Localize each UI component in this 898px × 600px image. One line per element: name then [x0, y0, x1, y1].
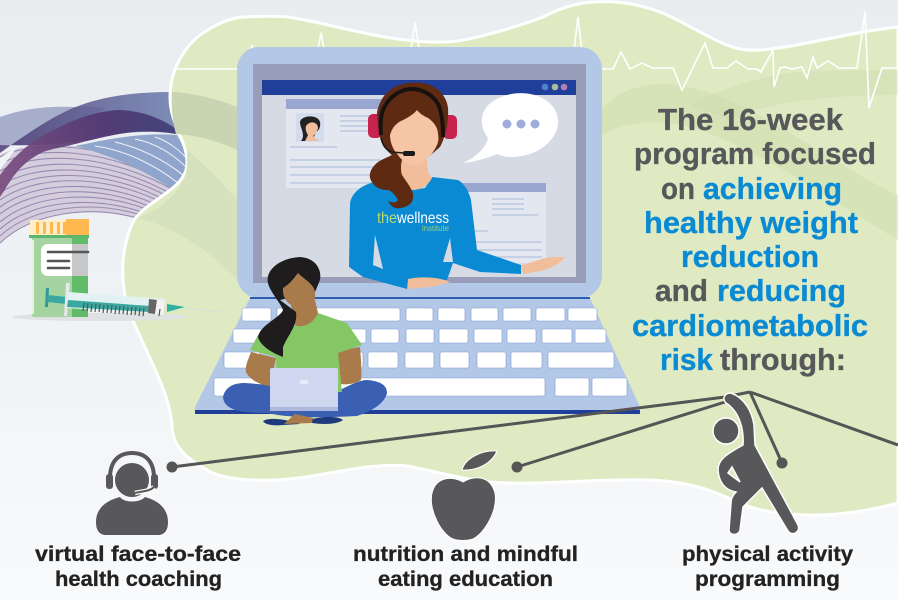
lilac line fan: [0, 145, 190, 243]
icon: stretching person: [713, 393, 799, 534]
ground shadow: [12, 313, 188, 321]
student legs: [223, 380, 387, 417]
heading: reducing: [717, 273, 846, 308]
bottle cap: [30, 220, 89, 236]
heading: reduction: [681, 239, 819, 274]
student hair: [258, 257, 320, 357]
coach hair: [370, 83, 448, 208]
faded ribbons inside blob: [137, 92, 237, 280]
caption: nutrition: eating education: [378, 568, 553, 591]
heading: The 16-week: [658, 102, 844, 137]
heading: on: [661, 171, 695, 206]
heading: cardiometabolic: [632, 308, 868, 343]
heading: healthy weight: [644, 205, 858, 240]
caption: physical activity: physical activity: [682, 543, 853, 566]
student face: [283, 273, 315, 309]
heading: through:: [720, 342, 846, 377]
screen: [262, 80, 576, 277]
heading: and: [655, 273, 708, 308]
bottle body: [32, 237, 88, 317]
heading: achieving: [703, 171, 842, 206]
ribbons: purple and blue waves: [0, 92, 192, 243]
syringe: [45, 283, 222, 316]
caption: physical activity: programming: [695, 568, 840, 591]
speech bubble: [463, 93, 558, 163]
caption: nutrition: [353, 543, 578, 591]
medicine bottle: [12, 219, 188, 321]
coach ear cups: [368, 114, 457, 139]
ECG heartbeat line: [177, 12, 898, 108]
heading: risk: [660, 342, 714, 377]
laptop lid: [237, 47, 602, 298]
student shirt: [250, 313, 362, 392]
bottle label: [41, 244, 88, 276]
green blob background: [123, 2, 898, 515]
green wave overlays: [602, 70, 898, 240]
right profile card: [457, 183, 546, 263]
student feet: [263, 417, 343, 425]
caption: coaching: health coaching: [55, 568, 222, 591]
coach headset: [381, 89, 443, 156]
caption: nutrition: nutrition and mindful: [353, 543, 578, 566]
shirt logo: the: [377, 210, 397, 227]
small pale gap: [0, 146, 18, 170]
pale blue upper ribbon: [0, 107, 105, 145]
caption: coaching: virtual face-to-face: [35, 543, 241, 566]
student arms: [246, 347, 361, 386]
shirt logo: institute: [422, 224, 450, 233]
caption: coaching: [35, 543, 241, 591]
icon: apple: [431, 451, 497, 540]
coach face: [390, 110, 438, 165]
connector lines: [166, 392, 898, 472]
shirt logo: [377, 210, 450, 233]
dark purple ribbon: [0, 110, 176, 197]
blue line fan: [75, 134, 192, 190]
coach avatar: [349, 83, 565, 289]
keyboard keys: [214, 308, 627, 396]
dark blue-purple ribbon: [0, 92, 176, 153]
heading: program focused: [634, 136, 876, 171]
heading: [632, 102, 876, 377]
student neck: [290, 300, 318, 326]
coach neck: [401, 158, 432, 190]
ECG tips behind blob line: [316, 17, 583, 60]
shirt logo: wellness: [396, 210, 449, 227]
coach hands: [408, 257, 565, 289]
browser header bar: [262, 80, 576, 95]
icon: coach with headset: [96, 453, 168, 535]
left profile card: [286, 99, 390, 188]
screen bezel: [253, 64, 586, 283]
coach shirt: [349, 177, 521, 289]
small laptop: [270, 368, 338, 411]
caption: physical activity: [682, 543, 853, 591]
laptop: [195, 47, 640, 414]
student on laptop: [223, 257, 387, 425]
laptop keyboard base: [195, 298, 640, 414]
